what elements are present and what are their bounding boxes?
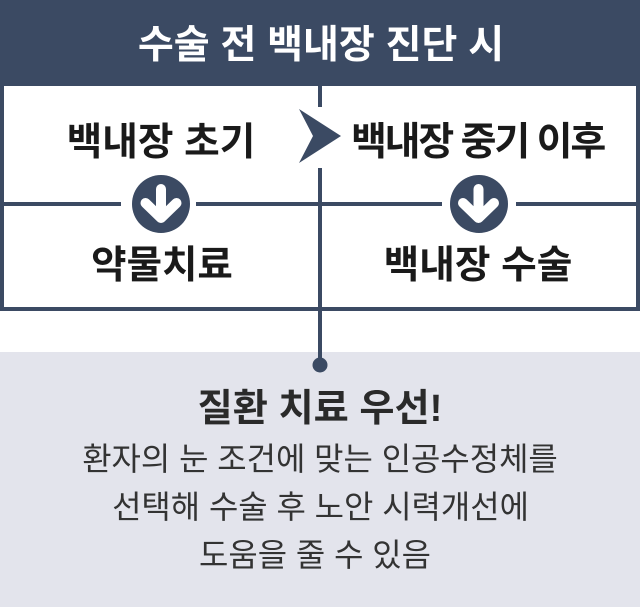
panel: diagnosis table frame [2,84,638,360]
connector dot [312,358,328,372]
treatment: cataract surgery: 백내장 수술 [384,244,572,287]
summary heading: 질환 치료 우선! [198,387,442,430]
summary body text: 도움을 줄 수 있음 [199,537,431,573]
heading: mid cataract or later: 백내장 중기 이후 [351,121,605,164]
arrow: early to mid stage [299,109,341,163]
icon: down arrow right [450,175,508,233]
summary body text [82,441,558,573]
heading: early cataract: 백내장 초기 [67,121,255,164]
title: 수술 전 백내장 진단 시 [138,24,504,67]
summary body text: 선택해 수술 후 노안 시력개선에 [112,489,529,525]
icon: down arrow left [132,175,190,233]
treatment: medication: 약물치료 [91,244,233,287]
summary body text: 환자의 눈 조건에 맞는 인공수정체를 [82,441,558,477]
panel: bottom summary background [0,352,640,607]
header bar [0,0,640,85]
